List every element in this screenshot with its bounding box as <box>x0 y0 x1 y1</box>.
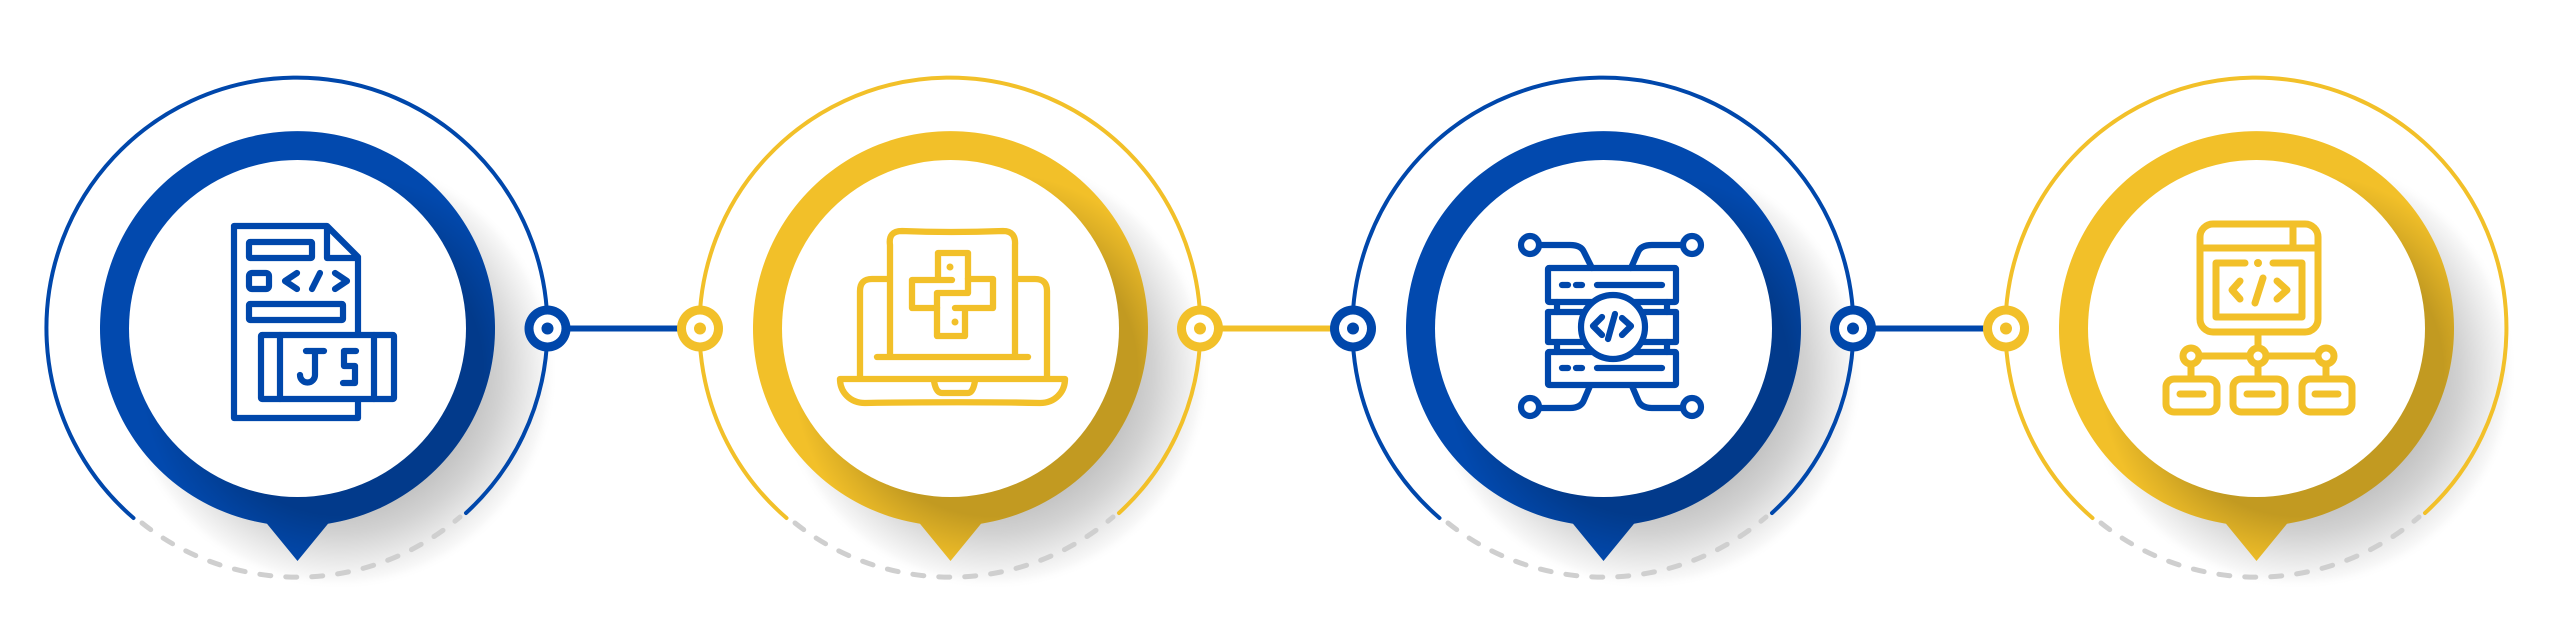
step 1: blue javascript file <box>46 78 570 590</box>
step 3: blue code server <box>1330 78 1876 590</box>
node left <box>524 306 570 352</box>
icon: JS file <box>234 226 394 418</box>
step 2: yellow python laptop <box>677 78 1223 590</box>
badge shell <box>46 78 558 590</box>
badge shell <box>699 78 1211 590</box>
node right <box>1830 306 1876 352</box>
connector: yellow 2 to 3 <box>1200 326 1353 332</box>
icon: web hierarchy <box>2166 224 2352 412</box>
node left <box>1330 306 1376 352</box>
node left <box>1983 306 2029 352</box>
node right <box>1177 306 1223 352</box>
badge shell <box>2005 78 2517 590</box>
icon: python laptop <box>840 231 1065 403</box>
step 4: yellow web hierarchy <box>1983 78 2517 590</box>
badge shell <box>1352 78 1864 590</box>
icon: code server <box>1521 236 1701 416</box>
connector: blue 3 to 4 <box>1853 326 2006 332</box>
node left <box>677 306 723 352</box>
connector: blue 1 to 2 <box>547 326 700 332</box>
